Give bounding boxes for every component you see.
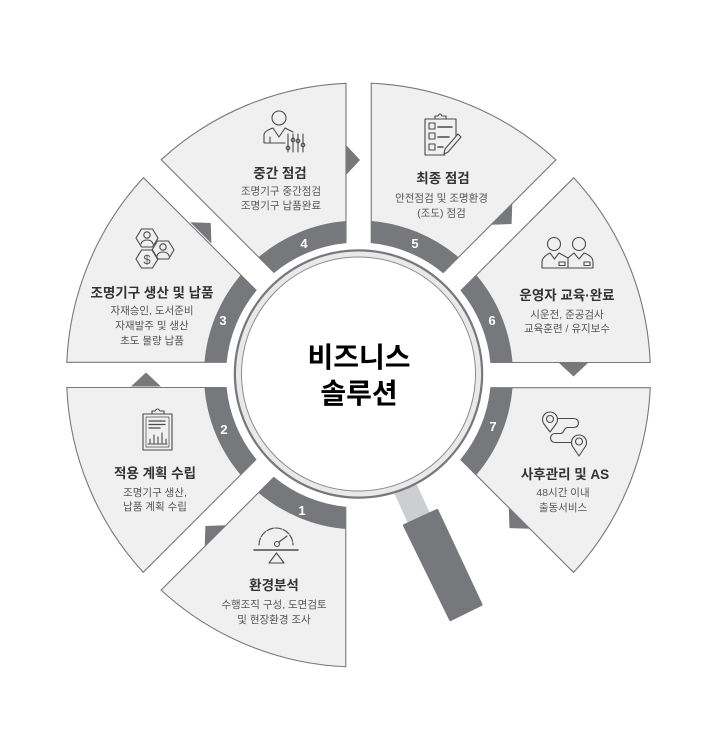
number 6: 6 [488,313,496,328]
text: step 5 description [395,192,488,220]
text: step 5 description: (조도) 점검 [417,208,466,220]
text: step 6 description: 교육훈련 / 유지보수 [524,322,610,335]
text: step 3 description: 자재발주 및 생산 [115,320,189,332]
icon: route with map pins [543,412,587,456]
text: step 1 description [221,599,327,626]
text: step 4 description: 조명기구 납품완료 [241,199,321,212]
text: step 6 description [524,309,610,335]
magnifier handle [404,510,481,620]
panel: step 6 operator training [461,178,650,376]
heading: step 2: 적용 계획 수립 [114,466,196,481]
icon: report clipboard [143,409,172,450]
heading: step 4: 중간 점검 [253,166,307,181]
text: step 1 description: 및 현장환경 조사 [237,613,311,626]
text: step 4 description: 조명기구 중간점검 [241,186,321,198]
heading: step 3: 조명기구 생산 및 납품 [90,286,214,300]
icon: checklist clipboard [425,114,461,155]
title: business solution: 솔루션 [320,378,398,409]
text: step 3 description [110,305,194,347]
number 4: 4 [300,236,308,251]
number 1: 1 [298,503,306,518]
text: step 1 description: 수행조직 구성, 도면검토 [221,599,327,611]
text: step 7 description: 출동서비스 [539,502,587,514]
number 2: 2 [220,422,228,437]
panel: step 7 after-sales [430,308,704,582]
panel: step 5 final inspection [292,29,566,304]
text: step 2 description [123,487,187,513]
text: step 7 description: 48시간 이내 [536,487,590,499]
text: step 2 description: 납품 계획 수립 [123,500,187,513]
text: step 7 description [536,487,590,514]
number 5: 5 [411,236,419,251]
magnifier lens ring [235,250,482,498]
panel: step 3 production and delivery [13,167,288,442]
heading: step 7: 사후관리 및 AS [521,467,609,482]
number 3: 3 [219,313,227,328]
icon: hexagons with people and dollar [136,229,174,268]
icon: magnifying glass [235,250,482,620]
panel: step 1 environment analysis [151,446,425,721]
text: step 6 description: 시운전, 준공검사 [530,309,604,321]
panel: step 2 application plan [67,372,256,572]
title: business solution [307,342,411,409]
icon: two staff members [542,238,593,268]
icon: hexagons with people and dollar: $ [143,252,151,267]
text: step 3 description: 자재승인, 도서준비 [110,305,194,317]
text: step 5 description: 안전점검 및 조명환경 [395,192,488,204]
icon: person with sliders [264,111,305,152]
icon: gauge on balance [254,528,298,563]
magnifier neck [390,474,434,532]
text: step 4 description [241,186,321,212]
heading: step 6: 운영자 교육·완료 [519,288,615,303]
number 7: 7 [489,419,497,434]
text: step 3 description: 초도 물량 납품 [120,335,184,347]
text: step 2 description: 조명기구 생산, [123,487,187,499]
heading: step 5: 최종 점검 [416,171,470,186]
heading: step 1: 환경분석 [249,578,299,593]
panel: step 4 mid-inspection [161,83,360,272]
title: business solution: 비즈니스 [307,342,411,373]
